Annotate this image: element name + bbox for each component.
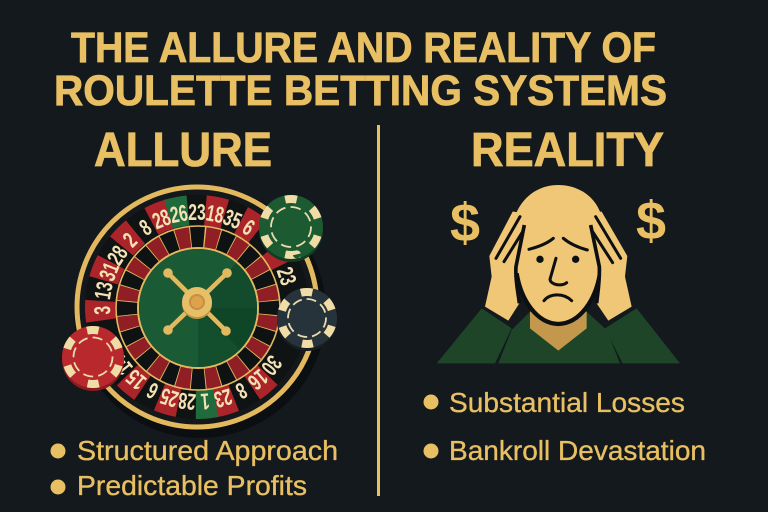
wheel numbers: 28 <box>177 387 197 414</box>
wheel numbers: 23 <box>271 264 301 289</box>
heading: allure: ALLURE <box>94 124 272 177</box>
wheel numbers: 18 <box>204 200 226 229</box>
roulette wheel <box>60 170 334 444</box>
wheel numbers: 13 <box>90 280 119 301</box>
wheel numbers: 31 <box>95 259 125 285</box>
wheel numbers: 35 <box>219 205 245 235</box>
wheel numbers: 8 <box>135 215 156 241</box>
bullet: bankroll devastation: Bankroll Devastation <box>449 435 706 466</box>
wheel numbers: 14 <box>107 350 138 380</box>
wheel numbers: 28 <box>149 205 175 235</box>
divider <box>377 125 380 496</box>
wheel numbers: 25 <box>157 382 182 412</box>
title <box>54 24 667 115</box>
wheel numbers: 15 <box>122 364 151 394</box>
wheel numbers: 23 <box>188 200 206 226</box>
shoulders <box>437 308 680 363</box>
centre spindle <box>163 268 232 336</box>
title: THE ALLURE AND REALITY OF <box>71 24 656 72</box>
green centre <box>139 249 257 367</box>
wheel numbers <box>90 200 301 414</box>
bullet: structured approach: Structured Approach <box>77 435 338 466</box>
neck <box>530 312 587 351</box>
wheel numbers: 3 <box>90 305 116 315</box>
right hand <box>590 212 632 321</box>
wheel numbers: 2 <box>118 228 143 253</box>
wheel numbers: 30 <box>256 350 287 380</box>
wheel numbers: 26 <box>168 200 190 229</box>
chip: green <box>258 194 324 262</box>
head <box>516 185 601 324</box>
face <box>529 238 587 301</box>
icon: dollar sign left: $ <box>450 193 480 253</box>
heading: reality: REALITY <box>471 124 664 177</box>
wheel numbers: 6 <box>238 215 259 241</box>
wheel numbers: 28 <box>103 241 134 270</box>
title: ROULETTE BETTING SYSTEMS <box>54 67 667 115</box>
wheel numbers: 1 <box>200 387 211 414</box>
wheel numbers: 8 <box>231 377 251 403</box>
left hand <box>485 212 525 321</box>
wheel numbers: 16 <box>242 364 272 394</box>
stressed person <box>437 185 680 363</box>
number pockets <box>60 170 334 444</box>
list: allure <box>50 435 338 501</box>
bullet: substantial losses: Substantial Losses <box>449 387 685 418</box>
wheel numbers: 23 <box>211 383 235 412</box>
wheel numbers: 6 <box>143 377 163 403</box>
chip: dark <box>276 287 338 351</box>
icon: dollar sign right: $ <box>636 191 666 251</box>
inner pocket ring <box>116 226 280 390</box>
bullet: predictable profits: Predictable Profits <box>77 470 307 501</box>
list: reality <box>424 387 706 466</box>
chip: red <box>61 325 125 391</box>
